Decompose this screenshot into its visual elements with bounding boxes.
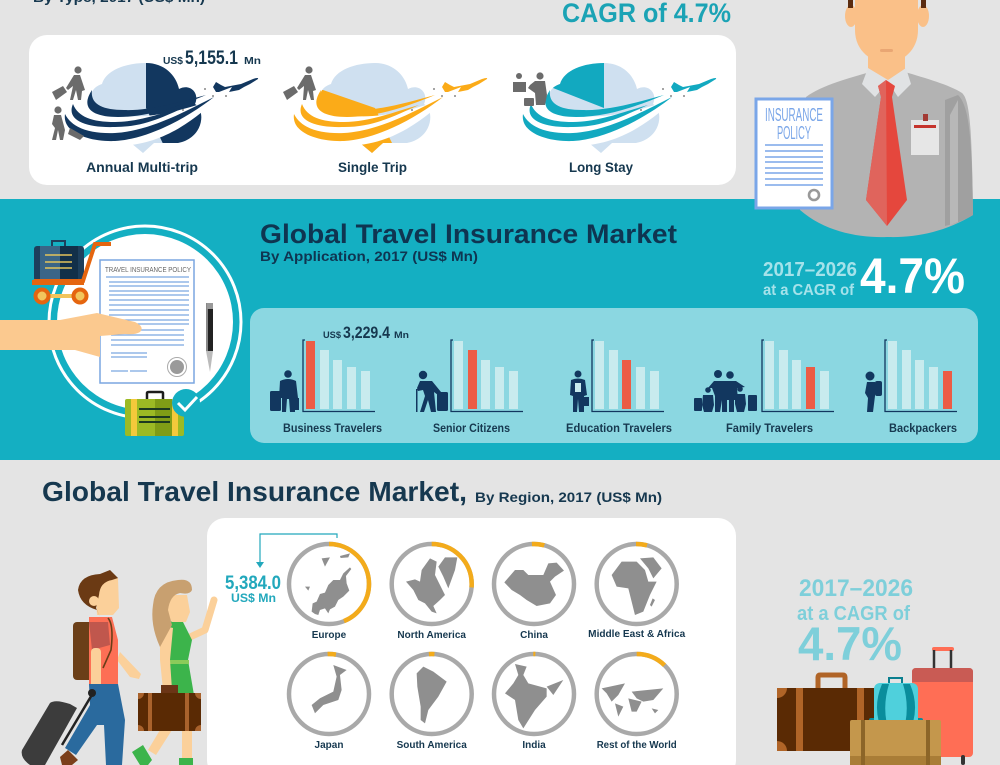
label: backpackers: Backpackers (889, 423, 957, 435)
insurance policy document: INSURANCE (765, 105, 823, 125)
region: rest of the world: Rest of the World (597, 740, 677, 751)
green suitcase (125, 392, 184, 436)
illustration: traveling couple (22, 570, 214, 765)
traveler woman (132, 580, 214, 765)
check badge (172, 389, 200, 417)
policy document (100, 260, 194, 383)
chart: long stay (513, 63, 716, 153)
panel: by region (207, 518, 736, 765)
region: middle east and africa: Middle East & Africa (588, 629, 686, 640)
value unit: europe: US$ Mn (231, 591, 276, 605)
tan case (850, 720, 941, 765)
chart: senior citizens (416, 340, 523, 412)
value: business travelers: Mn (394, 330, 409, 340)
value: annual multi-trip: US$ (163, 56, 183, 67)
teal application band (0, 199, 1000, 460)
label: long stay: Long Stay (569, 159, 633, 175)
illustration: policy in circle (0, 226, 241, 436)
heading: by application: Global Travel Insurance Market (260, 219, 677, 249)
label: single trip: Single Trip (338, 159, 407, 175)
subheading: by region: By Region, 2017 (US$ Mn) (475, 489, 662, 505)
CAGR callout: region: 4.7% (798, 617, 902, 670)
value: annual multi-trip (163, 48, 261, 69)
insurance policy document (756, 99, 832, 208)
chart: single trip (283, 63, 487, 160)
CAGR callout: application: at a CAGR of (763, 282, 855, 299)
region: india (493, 653, 575, 751)
value: europe: 5,384.0 (225, 573, 281, 594)
CAGR callout: application: 4.7% (860, 248, 965, 304)
region: china (492, 542, 576, 641)
value: business travelers: US$ (323, 330, 341, 340)
illustration: luggage stack (777, 647, 973, 765)
region: europe (289, 544, 369, 641)
region: south america: South America (397, 740, 467, 751)
region: middle east and africa (588, 543, 686, 640)
label: education travelers: Education Travelers (566, 423, 672, 435)
agent face (845, 0, 929, 82)
heading: by region: Global Travel Insurance Market, (42, 476, 467, 507)
region: rest of the world (597, 654, 677, 751)
rolling suitcase (22, 689, 96, 765)
luggage cart (32, 241, 111, 302)
CAGR callout: region: at a CAGR of (797, 603, 910, 625)
CAGR callout: application (763, 248, 965, 304)
chart: annual multi-trip (52, 63, 258, 153)
region: north america (392, 544, 472, 641)
hand (0, 313, 142, 357)
region: japan (288, 653, 370, 751)
subheading: by application: By Application, 2017 (US$ Mn) (260, 248, 478, 264)
insurance policy document: POLICY (777, 123, 811, 143)
value: business travelers (323, 323, 409, 342)
agent badge (911, 120, 939, 155)
agent shirt (800, 72, 973, 237)
CAGR callout: application: 2017–2026 (763, 259, 857, 281)
CAGR callout: region (797, 575, 913, 670)
region: europe: Europe (312, 630, 347, 641)
chart: backpackers (865, 340, 957, 412)
value: annual multi-trip: 5,155.1 (185, 48, 238, 69)
traveler man (22, 570, 141, 765)
brown suitcase (777, 675, 877, 751)
agent collar (862, 68, 911, 97)
CAGR callout: region: 2017–2026 (799, 575, 913, 602)
region: china: China (520, 630, 548, 641)
label: business travelers: Business Travelers (283, 423, 382, 435)
chart: education travelers (570, 340, 664, 412)
value: annual multi-trip: Mn (244, 56, 261, 67)
chart: business travelers (270, 340, 375, 412)
panel: by application (250, 308, 978, 443)
policy document: TRAVEL INSURANCE POLICY (105, 267, 191, 274)
value: business travelers: 3,229.4 (343, 323, 390, 342)
chart: family travelers (694, 340, 834, 412)
illustration: insurance agent (756, 0, 973, 237)
connector arrow (256, 534, 337, 568)
coral suitcase (912, 647, 973, 765)
region: north america: North America (397, 630, 466, 641)
region: japan: Japan (315, 740, 343, 751)
teal bag (869, 678, 923, 736)
region: south america (389, 651, 474, 751)
region: india: India (522, 740, 546, 751)
label: annual multi-trip: Annual Multi-trip (86, 159, 198, 175)
label: family travelers: Family Travelers (726, 423, 813, 435)
panel: trip types (29, 35, 736, 185)
pen (206, 303, 213, 372)
label: senior citizens: Senior Citizens (433, 423, 510, 435)
agent tie (866, 80, 907, 226)
